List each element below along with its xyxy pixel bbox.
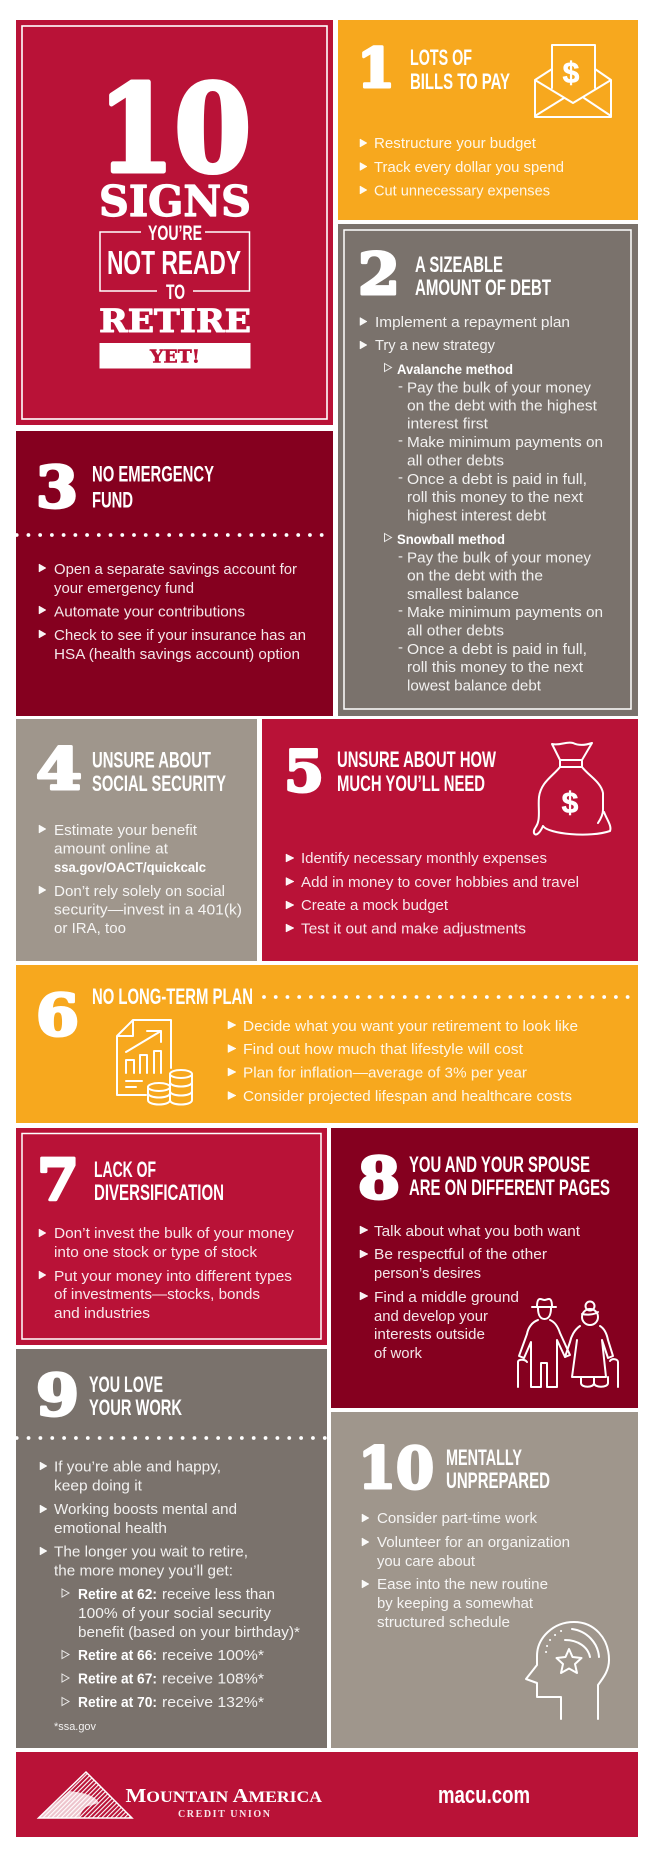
bullet list: security—invest in a 401(k) — [54, 902, 242, 919]
heading: LOTS OF — [410, 45, 472, 70]
bullet list: into one stock or type of stock — [54, 1244, 258, 1261]
heading — [92, 748, 226, 796]
sub-list: retirement ages: receive 108%* — [162, 1671, 264, 1688]
heading: 10: 10 — [98, 59, 251, 200]
bullet list — [360, 314, 570, 354]
panel: 7 lack of diversification — [16, 1128, 327, 1345]
bullet list: Automate your contributions — [54, 603, 245, 620]
sub-list: retirement ages: Retire at 66: — [78, 1647, 157, 1664]
panel: 5 unsure about how much you'll need — [262, 719, 638, 961]
bullet list: Plan for inflation—average of 3% per year — [243, 1065, 527, 1082]
icon: money bag: $ — [562, 787, 579, 820]
subheading: you're: YOU’RE — [148, 222, 202, 245]
panel: 6 no long-term plan — [16, 965, 638, 1123]
icon: envelope with bill: $ — [563, 57, 580, 90]
bullet list: Check to see if your insurance has an — [54, 627, 306, 644]
bullet list — [39, 561, 306, 663]
heading: AMOUNT OF DEBT — [415, 275, 551, 300]
icon: head with star — [526, 1622, 609, 1719]
banner: yet — [100, 343, 250, 368]
bullet list: Ease into the new routine — [377, 1576, 548, 1593]
bullet list: Talk about what you both want — [374, 1223, 581, 1240]
bullet list — [39, 1225, 295, 1322]
bullet list: Test it out and make adjustments — [301, 921, 526, 938]
sub-list: retirement ages: receive less than — [162, 1586, 275, 1603]
bullet list: of work — [374, 1345, 422, 1362]
bullet list — [362, 1510, 570, 1631]
bullet list: Open a separate savings account for — [54, 561, 297, 578]
bullet list: Create a mock budget — [301, 897, 449, 914]
bullet list: Find out how much that lifestyle will cost — [243, 1041, 524, 1058]
sub-list: avalanche method: highest interest debt — [407, 508, 547, 525]
banner: yet: YET! — [149, 346, 200, 368]
sub-list: avalanche method: Pay the bulk of your money — [407, 380, 592, 397]
heading: LACK OF — [94, 1157, 156, 1182]
bullet list: amount online at — [54, 841, 169, 858]
sub-list: snowball method: Make minimum payments on — [407, 604, 603, 621]
heading — [415, 252, 551, 300]
sub-list: avalanche method: - — [398, 469, 403, 486]
icon: report with chart and coins — [117, 1020, 192, 1104]
bullet list — [39, 822, 242, 937]
sub-list: retirement ages: benefit (based on your birthday)* — [78, 1624, 300, 1641]
sub-list: avalanche method — [384, 361, 603, 525]
sub-list: snowball method: - — [398, 602, 403, 619]
heading: MUCH YOU’LL NEED — [337, 771, 485, 796]
sub-list: avalanche method: on the debt with the highest — [407, 398, 598, 415]
bullet list: the more money you’ll get: — [54, 1563, 233, 1580]
number 5: 5 — [284, 738, 324, 805]
number 8: 8 — [358, 1145, 400, 1212]
heading: NO LONG-TERM PLAN — [92, 984, 253, 1009]
sub-list: avalanche method: interest first — [407, 416, 489, 433]
bullet list — [286, 850, 579, 938]
heading: retire: RETIRE — [99, 302, 251, 340]
panel: 10 mentally unprepared — [331, 1412, 638, 1748]
heading: DIVERSIFICATION — [94, 1180, 224, 1205]
heading: FUND — [92, 488, 133, 512]
bullet list: or IRA, too — [54, 920, 126, 937]
panel: 2 a sizeable amount of debt — [338, 224, 638, 716]
heading: YOUR WORK — [89, 1395, 182, 1420]
sub-list: retirement ages — [62, 1586, 300, 1711]
bullet list: of investments—stocks, bonds — [54, 1286, 260, 1303]
bullet list: Try a new strategy — [375, 337, 495, 354]
sub-list: snowball method: lowest balance debt — [407, 678, 542, 695]
bullet list: you care about — [377, 1553, 476, 1570]
panel: 8 you and your spouse — [331, 1128, 638, 1408]
panel: title — [16, 20, 333, 425]
heading — [92, 462, 214, 512]
sub-list: retirement ages: Retire at 62: — [78, 1586, 157, 1603]
bullet list: The longer you wait to retire, — [54, 1544, 248, 1561]
bullet list: and industries — [54, 1305, 150, 1322]
footer: mountain america credit union — [16, 1752, 638, 1837]
heading: YOU LOVE — [89, 1372, 163, 1397]
heading: signs: SIGNS — [99, 177, 251, 226]
panel: 3 no emergency fund — [16, 431, 333, 716]
subheading: to: TO — [166, 281, 185, 304]
sub-list: retirement ages: Retire at 67: — [78, 1671, 157, 1688]
heading — [410, 45, 510, 94]
heading: SOCIAL SECURITY — [92, 771, 226, 796]
heading — [409, 1152, 610, 1200]
sub-list: avalanche method: Avalanche method — [397, 361, 513, 377]
sub-list: snowball method: Snowball method — [397, 531, 505, 547]
number 3: 3 — [36, 454, 78, 521]
sub-list: retirement ages: 100% of your social security — [78, 1605, 272, 1622]
heading — [89, 1372, 182, 1420]
bullet list: Consider part-time work — [377, 1510, 537, 1527]
bullet list — [360, 1223, 581, 1362]
sub-list: snowball method: - — [398, 548, 403, 565]
bullet list: Working boosts mental and — [54, 1501, 237, 1518]
sub-list: avalanche method: all other debts — [407, 453, 504, 470]
frame around not ready — [100, 232, 250, 291]
bullet list — [228, 1018, 578, 1105]
number 10: 10 — [358, 1435, 434, 1502]
sub-list: avalanche method: Make minimum payments on — [407, 434, 603, 451]
panel: 9 you love your work — [16, 1349, 327, 1748]
sub-list: avalanche method: - — [398, 378, 403, 395]
bullet list: structured schedule — [377, 1614, 510, 1631]
bullet list: Find a middle ground — [374, 1289, 519, 1306]
heading: UNSURE ABOUT HOW — [337, 747, 496, 772]
panel: 1 lots of bills to pay — [338, 20, 638, 220]
bullet list: Add in money to cover hobbies and travel — [301, 874, 579, 891]
bullet list: Track every dollar you spend — [374, 159, 564, 176]
heading: MENTALLY — [446, 1445, 522, 1470]
sub-list: retirement ages: Retire at 70: — [78, 1694, 157, 1711]
bullet list: Be respectful of the other — [374, 1246, 547, 1263]
sub-list: avalanche method: - — [398, 432, 403, 449]
bullet list: HSA (health savings account) option — [54, 646, 300, 663]
wordmark — [126, 1785, 322, 1820]
number 1: 1 — [357, 36, 395, 100]
sub-list: retirement ages: receive 132%* — [162, 1694, 264, 1711]
bullet list: Volunteer for an organization — [377, 1534, 570, 1551]
bullet list: ssa.gov/OACT/quickcalc — [54, 859, 206, 875]
logo: mountain triangle — [38, 1772, 132, 1818]
wordmark: CREDIT UNION — [178, 1809, 271, 1820]
number 7: 7 — [37, 1147, 79, 1214]
bullet list: and develop your — [374, 1308, 488, 1325]
sub-list: snowball method: Once a debt is paid in full, — [407, 641, 587, 658]
bullet list: Implement a repayment plan — [375, 314, 570, 331]
sub-list: snowball method: all other debts — [407, 623, 504, 640]
bullet list: Don’t invest the bulk of your money — [54, 1225, 295, 1242]
bullet list: interests outside — [374, 1326, 485, 1343]
icon: envelope with bill — [535, 45, 611, 117]
panel: 4 unsure about social security — [16, 719, 257, 961]
bullet list — [40, 1459, 248, 1580]
icon: elderly couple — [518, 1299, 618, 1387]
sub-list: snowball method: Pay the bulk of your money — [407, 550, 592, 567]
bullet list: emotional health — [54, 1520, 167, 1537]
subheading: not ready: NOT READY — [107, 245, 241, 282]
sub-list: snowball method: - — [398, 639, 403, 656]
bullet list: Don’t rely solely on social — [54, 883, 225, 900]
icon: money bag — [534, 743, 610, 835]
sub-list: retirement ages: receive 100%* — [162, 1647, 264, 1664]
bullet list: your emergency fund — [54, 580, 194, 597]
bullet list: keep doing it — [54, 1478, 143, 1495]
heading: BILLS TO PAY — [410, 69, 510, 94]
bullet list: person’s desires — [374, 1265, 481, 1282]
bullet list: by keeping a somewhat — [377, 1595, 534, 1612]
website: macu.com — [438, 1782, 530, 1809]
bullet list: Put your money into different types — [54, 1268, 292, 1285]
number 2: 2 — [358, 241, 400, 308]
heading — [446, 1445, 550, 1493]
footnote: *ssa.gov — [54, 1721, 96, 1733]
bullet list: If you’re able and happy, — [54, 1459, 221, 1476]
number 9: 9 — [36, 1362, 79, 1429]
heading: UNSURE ABOUT — [92, 748, 211, 772]
bullet list: Estimate your benefit — [54, 822, 198, 839]
sub-list: snowball method: smallest balance — [407, 586, 519, 603]
bullet list: Identify necessary monthly expenses — [301, 850, 547, 867]
number 6: 6 — [36, 982, 79, 1049]
bullet list: Restructure your budget — [374, 135, 537, 152]
sub-list: snowball method: roll this money to the next — [407, 659, 584, 676]
heading: NO EMERGENCY — [92, 462, 214, 486]
bullet list — [360, 135, 564, 200]
number 4: 4 — [36, 736, 82, 803]
heading — [337, 747, 496, 796]
bullet list: Consider projected lifespan and healthcare costs — [243, 1088, 572, 1105]
bullet list: Cut unnecessary expenses — [374, 182, 550, 200]
sub-list: snowball method — [384, 531, 603, 695]
heading: UNPREPARED — [446, 1468, 550, 1493]
heading — [94, 1157, 224, 1205]
wordmark: MOUNTAIN AMERICA — [126, 1785, 322, 1807]
sub-list: snowball method: on the debt with the — [407, 568, 543, 585]
heading: A SIZEABLE — [415, 252, 503, 277]
bullet list: Decide what you want your retirement to look like — [243, 1018, 578, 1035]
sub-list: avalanche method: roll this money to the next — [407, 489, 584, 506]
sub-list: avalanche method: Once a debt is paid in full, — [407, 471, 587, 488]
